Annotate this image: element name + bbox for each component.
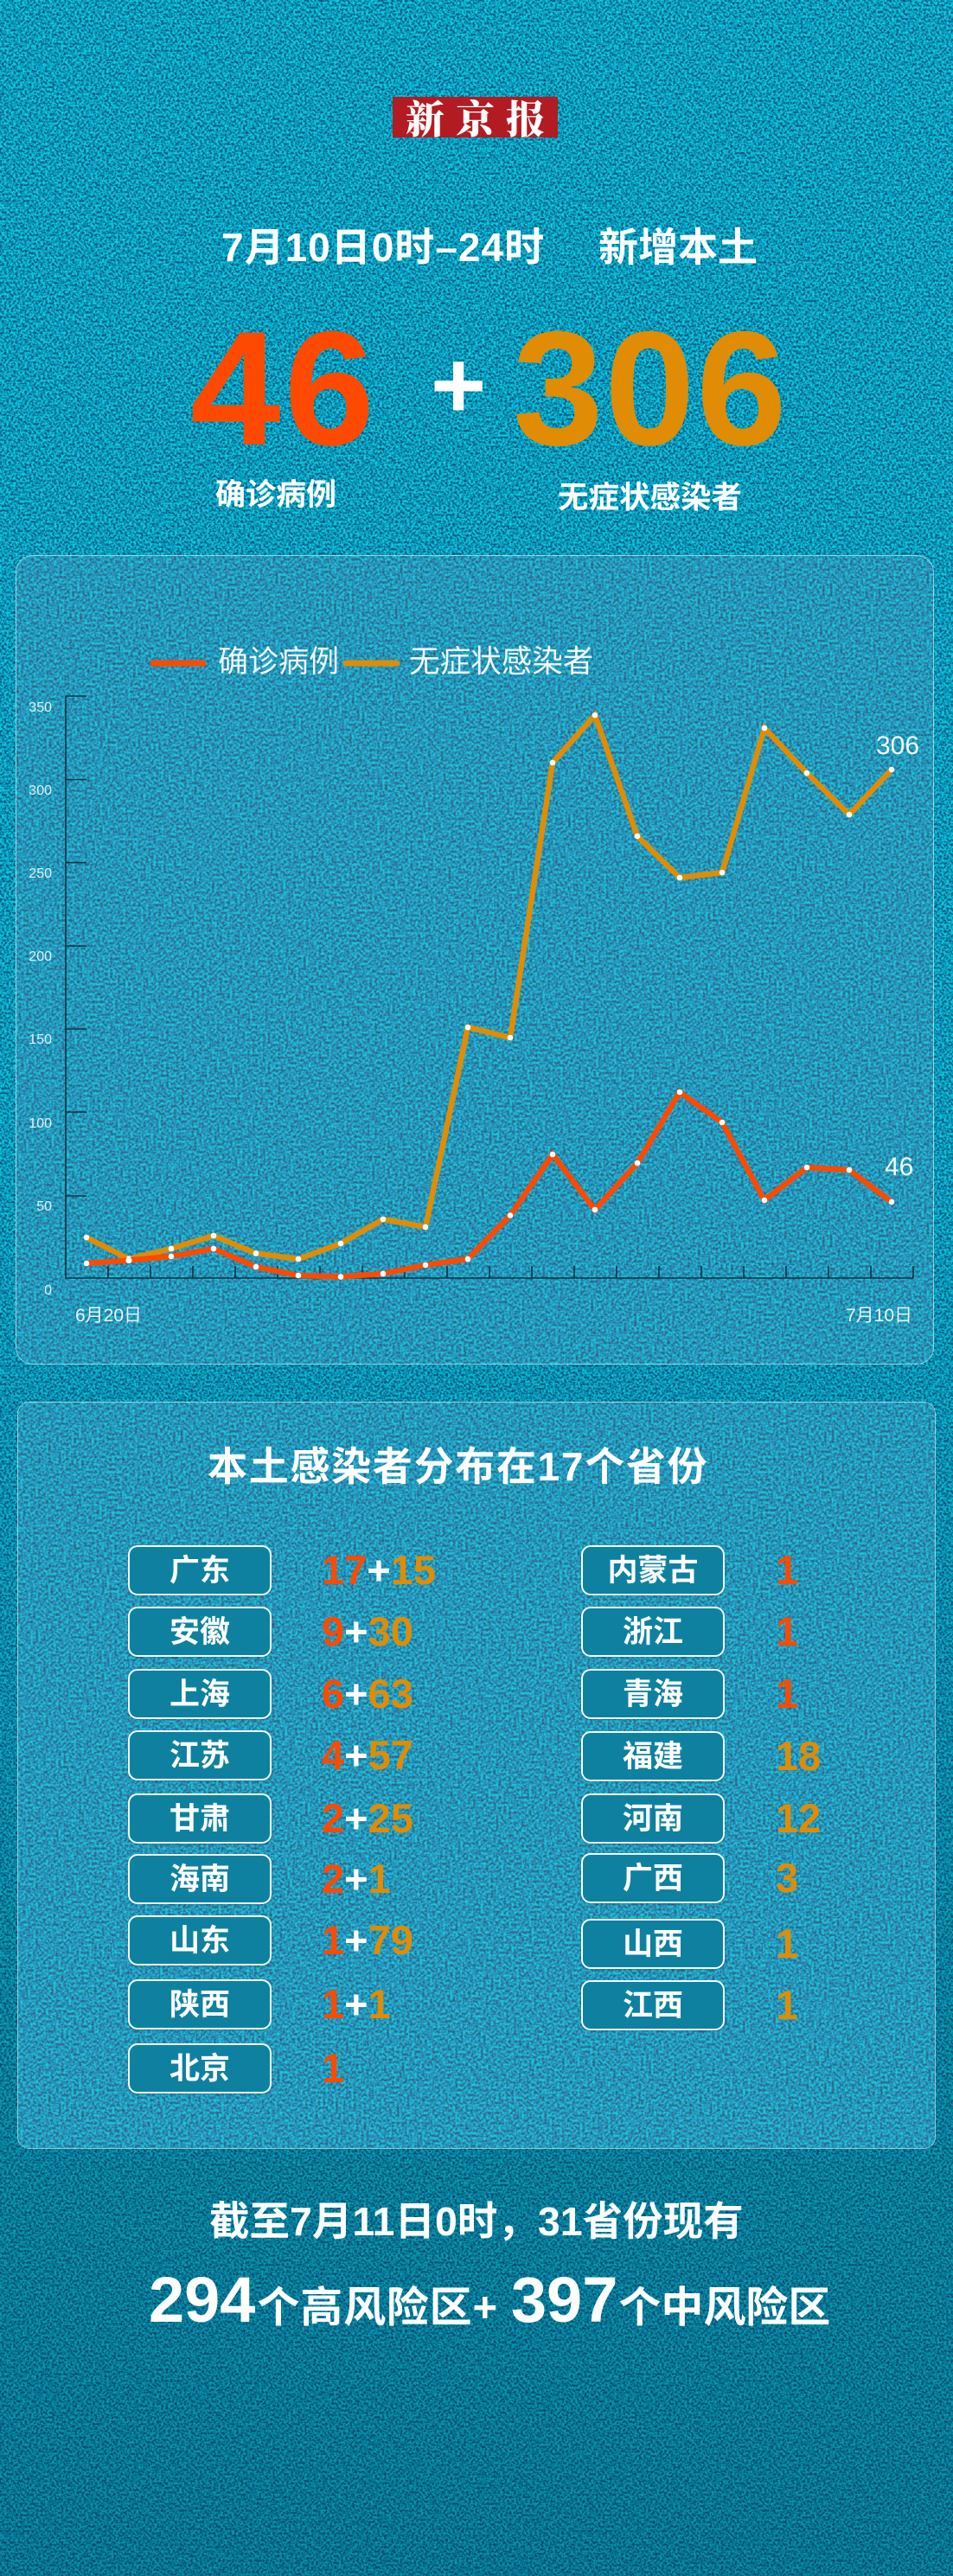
province list: left column: 9+30 bbox=[322, 1608, 413, 1654]
province list: left column: 6+63 bbox=[322, 1671, 413, 1716]
province list: left column: 1+79 bbox=[322, 1917, 413, 1963]
x axis labels: 6月20日 bbox=[75, 1306, 142, 1326]
province list: left column: 2+1 bbox=[322, 1856, 391, 1902]
x axis labels bbox=[75, 1306, 912, 1326]
y axis labels: 100 bbox=[29, 1116, 52, 1131]
series: confirmed bbox=[84, 1090, 894, 1280]
y axis labels: 300 bbox=[29, 783, 52, 798]
province list: right column: 内蒙古 bbox=[607, 1554, 699, 1588]
heading: date range: 7月10日0时–24时 bbox=[221, 225, 545, 270]
big number: asymptomatic: 306 bbox=[513, 297, 788, 479]
province list: right column: 广西 bbox=[623, 1862, 683, 1895]
province list: left column: 甘肃 bbox=[169, 1802, 230, 1836]
logo: 新京报 bbox=[393, 97, 558, 137]
y axis labels bbox=[29, 700, 52, 1298]
footer line 2: risk areas: 294个高风险区+397个中风险区 bbox=[149, 2264, 830, 2336]
province list: right column: 1 bbox=[776, 1608, 798, 1654]
province list: right column: 福建 bbox=[623, 1740, 683, 1774]
y axis labels: 0 bbox=[44, 1283, 52, 1298]
province list: right column: 山西 bbox=[623, 1927, 683, 1961]
province list: left column: 山东 bbox=[169, 1924, 230, 1958]
y axis labels: 350 bbox=[29, 700, 52, 715]
province list: right column: 1 bbox=[776, 1982, 798, 2028]
panel: line chart bbox=[16, 555, 934, 1365]
province list: right column: 浙江 bbox=[623, 1615, 683, 1649]
province list: left column: 江苏 bbox=[169, 1739, 230, 1773]
province list: left column: 2+25 bbox=[322, 1795, 413, 1841]
end value labels: 306 bbox=[876, 732, 919, 760]
province list: left column: 海南 bbox=[169, 1863, 230, 1896]
province list: left column: 广东 bbox=[169, 1554, 230, 1588]
end value labels bbox=[876, 732, 919, 1181]
heading: provinces: 本土感染者分布在17个省份 bbox=[208, 1444, 708, 1489]
province list: left column: 安徽 bbox=[169, 1615, 230, 1649]
province list: right column: 1 bbox=[776, 1671, 798, 1716]
province list: right column: 青海 bbox=[623, 1678, 683, 1711]
province list: left column: 1 bbox=[322, 2045, 344, 2091]
logo: 新京报: 新京报 bbox=[406, 88, 556, 144]
province list: left column: 1+1 bbox=[322, 1981, 391, 2027]
province list: right column: 1 bbox=[776, 1547, 798, 1593]
province list: right column: 河南 bbox=[623, 1802, 683, 1836]
panel: provinces bbox=[17, 1402, 936, 2149]
province list: left column: 17+15 bbox=[322, 1547, 436, 1593]
province list: right column: 18 bbox=[776, 1733, 821, 1779]
heading: new local cases: 新增本土 bbox=[598, 225, 758, 270]
province list: right column: 1 bbox=[776, 1921, 798, 1966]
y axis labels: 200 bbox=[29, 949, 52, 964]
series: asymptomatic bbox=[84, 713, 894, 1262]
province list: right column: 12 bbox=[776, 1795, 821, 1841]
province list: left column: 上海 bbox=[169, 1678, 230, 1711]
y axis labels: 250 bbox=[29, 866, 52, 881]
province list: left column bbox=[127, 1545, 436, 2095]
legend: 无症状感染者 bbox=[409, 644, 593, 679]
y axis labels: 50 bbox=[36, 1199, 52, 1214]
big number: confirmed: 46 bbox=[190, 297, 378, 479]
province list: right column bbox=[580, 1545, 821, 2032]
province list: left column: 4+57 bbox=[322, 1732, 413, 1778]
province list: right column: 3 bbox=[776, 1855, 798, 1901]
label: asymptomatic: 无症状感染者 bbox=[558, 480, 742, 515]
province list: left column: 北京 bbox=[169, 2052, 230, 2086]
end value labels: 46 bbox=[885, 1153, 913, 1181]
province list: left column: 陕西 bbox=[169, 1988, 230, 2022]
legend bbox=[153, 644, 593, 679]
label: confirmed cases: 确诊病例 bbox=[215, 478, 336, 512]
x axis labels: 7月10日 bbox=[846, 1306, 912, 1326]
plus sign: + bbox=[431, 332, 486, 438]
legend: 确诊病例 bbox=[218, 645, 339, 679]
axes bbox=[66, 696, 913, 1278]
y axis labels: 150 bbox=[29, 1032, 52, 1047]
line chart: daily confirmed and asymptomatic cases bbox=[29, 644, 919, 1326]
footer line 1: 截至7月11日0时，31省份现有 bbox=[209, 2199, 744, 2244]
province list: right column: 江西 bbox=[623, 1989, 683, 2023]
